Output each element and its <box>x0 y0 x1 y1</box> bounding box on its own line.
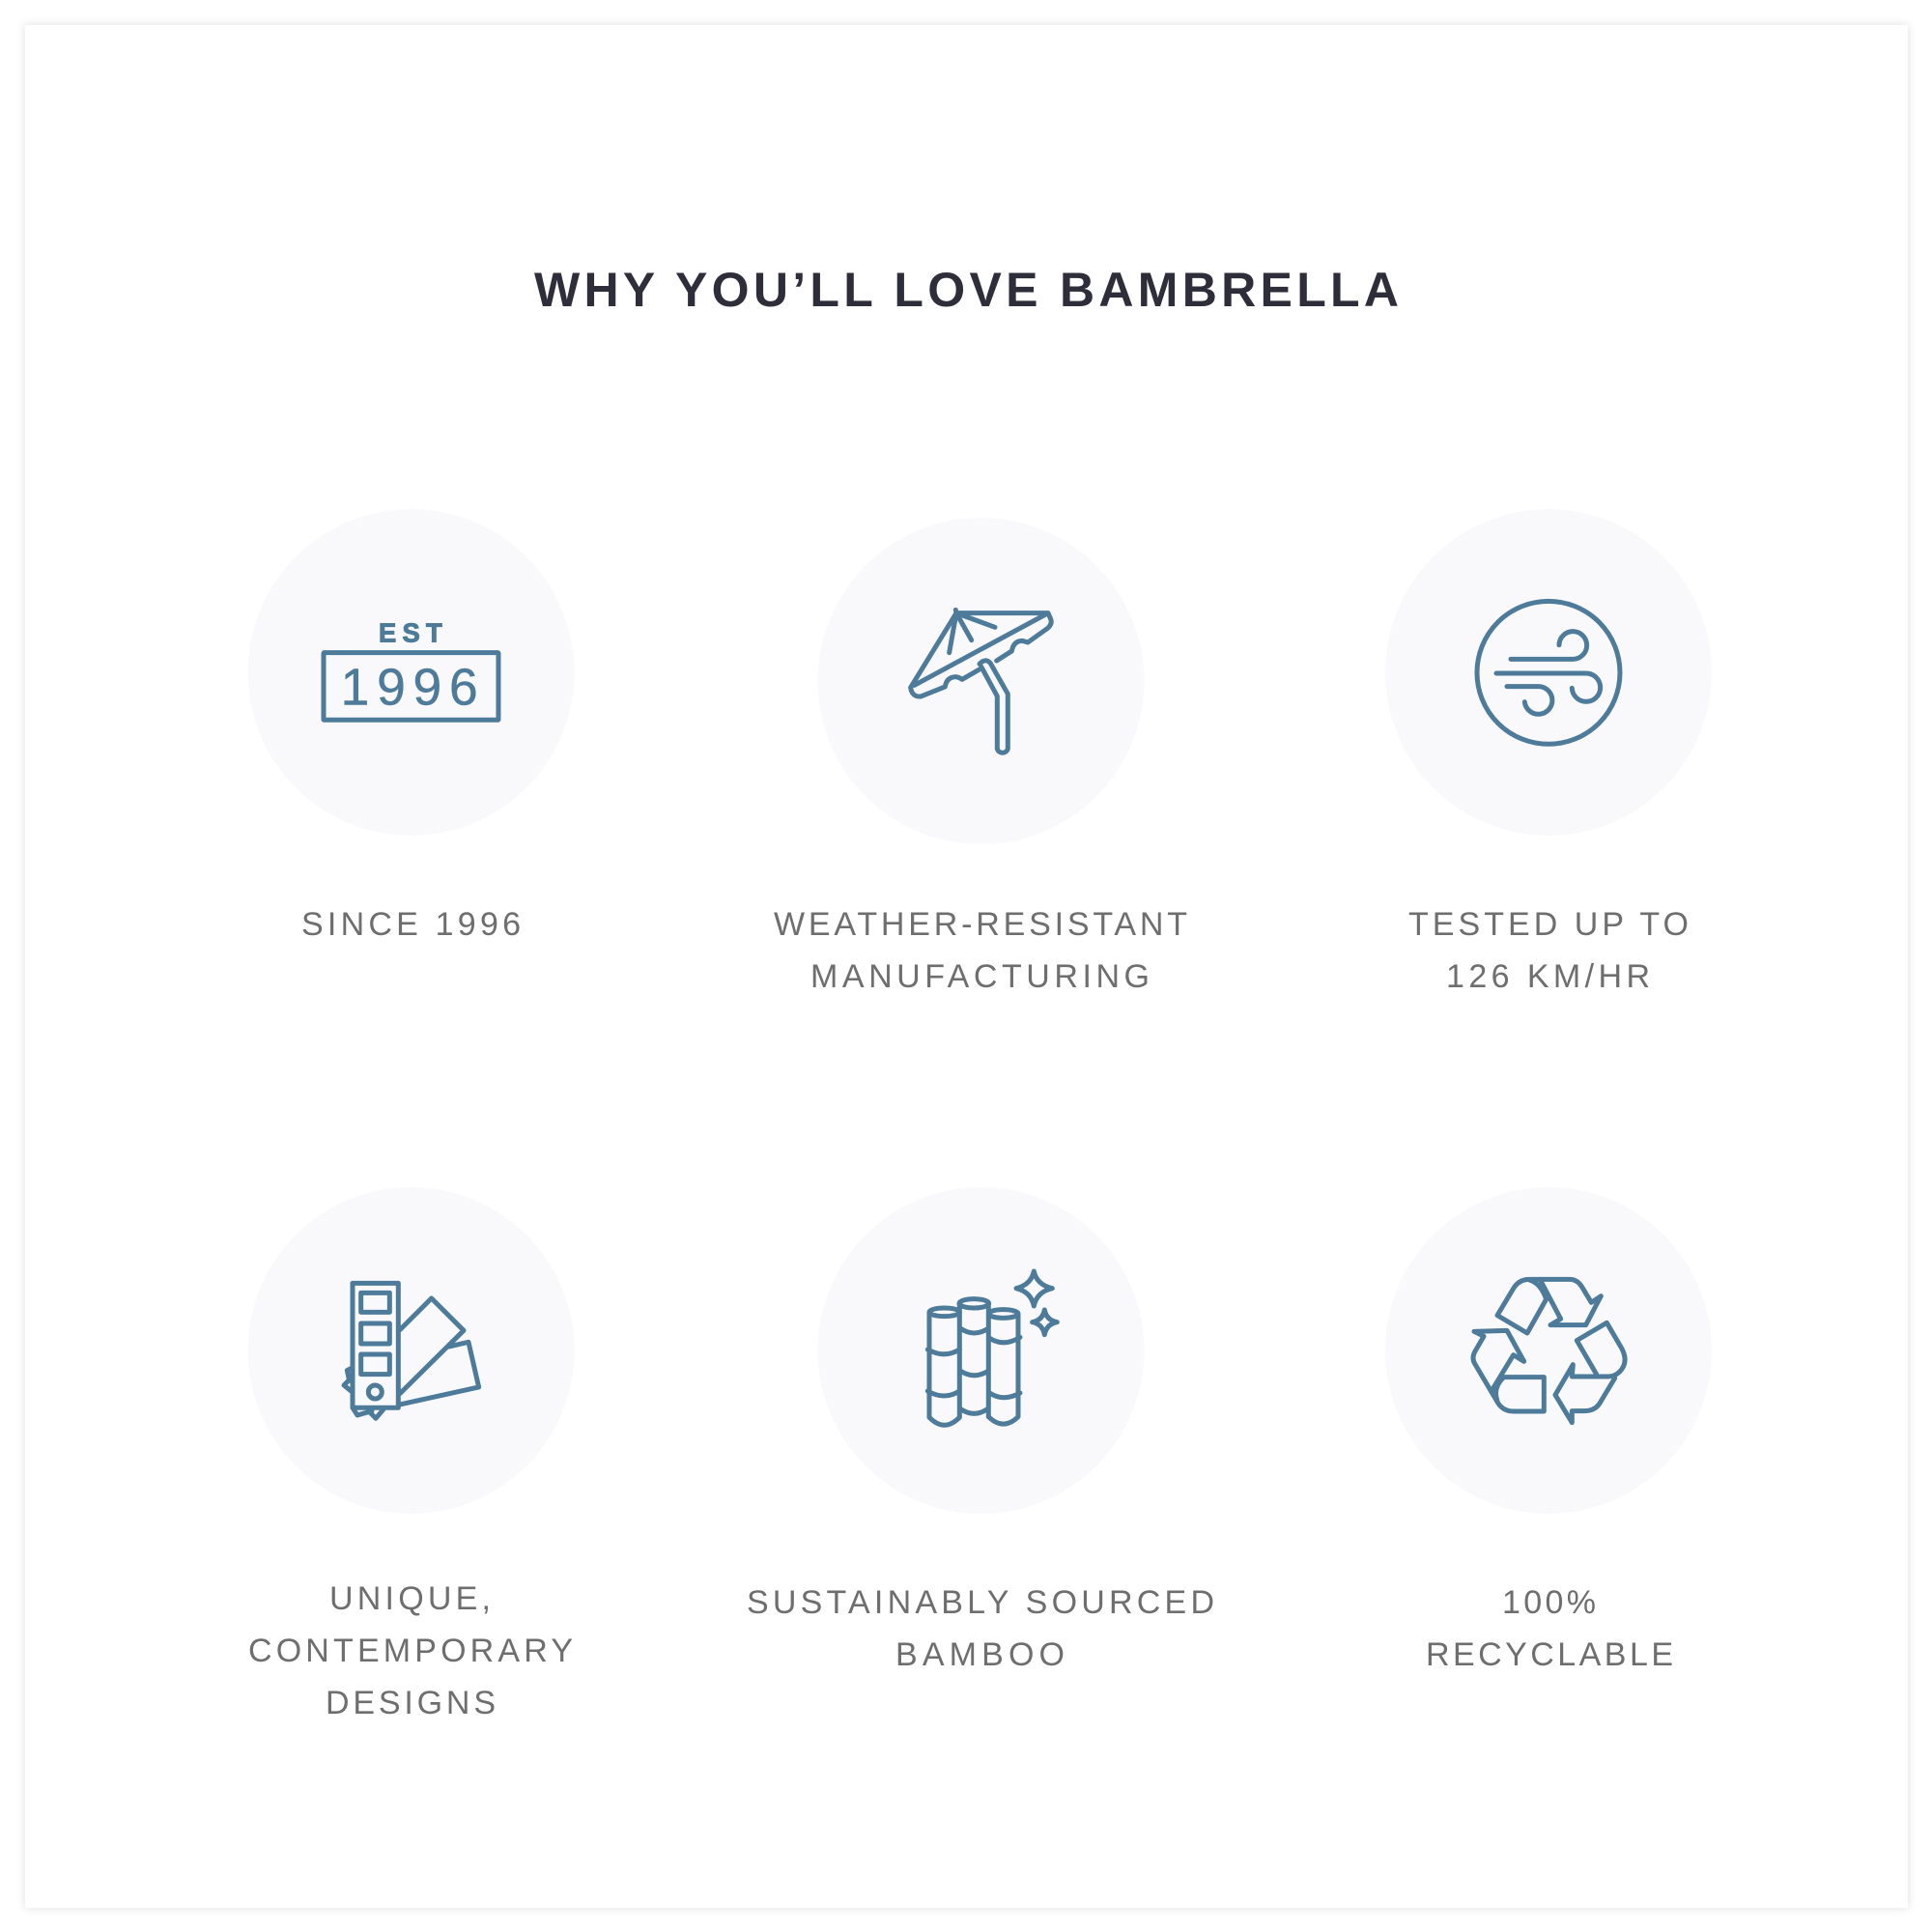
icon: est 1996 badge: 1996 <box>341 659 478 716</box>
label: sustainably sourced bamboo: BAMBOO <box>895 1636 1065 1673</box>
icon disc: sustainably sourced <box>817 1187 1144 1514</box>
label: weather-resistant manufacturing: MANUFACTURING <box>810 958 1150 995</box>
label: tested up to 126 km/hr: TESTED UP TO <box>1408 906 1689 943</box>
panel: wind tested <box>1385 509 1712 995</box>
icon: colour swatch fan <box>344 1283 479 1418</box>
label: weather-resistant manufacturing <box>774 906 1187 995</box>
label: since 1996: SINCE 1996 <box>301 906 521 943</box>
label: 100% recyclable <box>1426 1584 1673 1673</box>
panel: sustainably sourced <box>747 1187 1214 1673</box>
icon: umbrella <box>911 610 1051 753</box>
icon: est 1996 badge: EST <box>379 618 442 648</box>
label: 100% recyclable: 100% <box>1502 1584 1596 1621</box>
label: unique contemporary designs: DESIGNS <box>326 1685 496 1721</box>
icon: wind in circle <box>1477 601 1620 744</box>
panel: since 1996 <box>247 509 574 943</box>
icon disc: since 1996 <box>247 509 574 836</box>
label: weather-resistant manufacturing: WEATHER-RESISTANT <box>774 906 1187 943</box>
label: unique contemporary designs <box>248 1580 573 1721</box>
label: sustainably sourced bamboo <box>747 1584 1214 1673</box>
label: tested up to 126 km/hr: 126 KM/HR <box>1446 958 1650 995</box>
panel: weather-resistant <box>774 518 1187 995</box>
label: unique contemporary designs: CONTEMPORARY <box>248 1633 573 1669</box>
label: 100% recyclable: RECYCLABLE <box>1426 1636 1673 1673</box>
icon disc: recyclable <box>1385 1187 1712 1514</box>
panel: unique designs <box>247 1187 574 1721</box>
label: unique contemporary designs: UNIQUE, <box>329 1580 491 1617</box>
icon disc: wind tested <box>1385 509 1712 836</box>
label: tested up to 126 km/hr <box>1408 906 1689 995</box>
icon: recycling arrows <box>1473 1279 1625 1423</box>
icon disc: weather-resistant <box>817 518 1144 844</box>
icon: est 1996 badge <box>324 618 498 720</box>
icon: bamboo with sparkles <box>927 1271 1057 1425</box>
icon disc: unique designs <box>247 1187 574 1514</box>
panel: recyclable <box>1385 1187 1712 1673</box>
label: sustainably sourced bamboo: SUSTAINABLY SOURCED <box>747 1584 1214 1621</box>
title: WHY YOU’LL LOVE BAMBRELLA <box>534 263 1399 317</box>
